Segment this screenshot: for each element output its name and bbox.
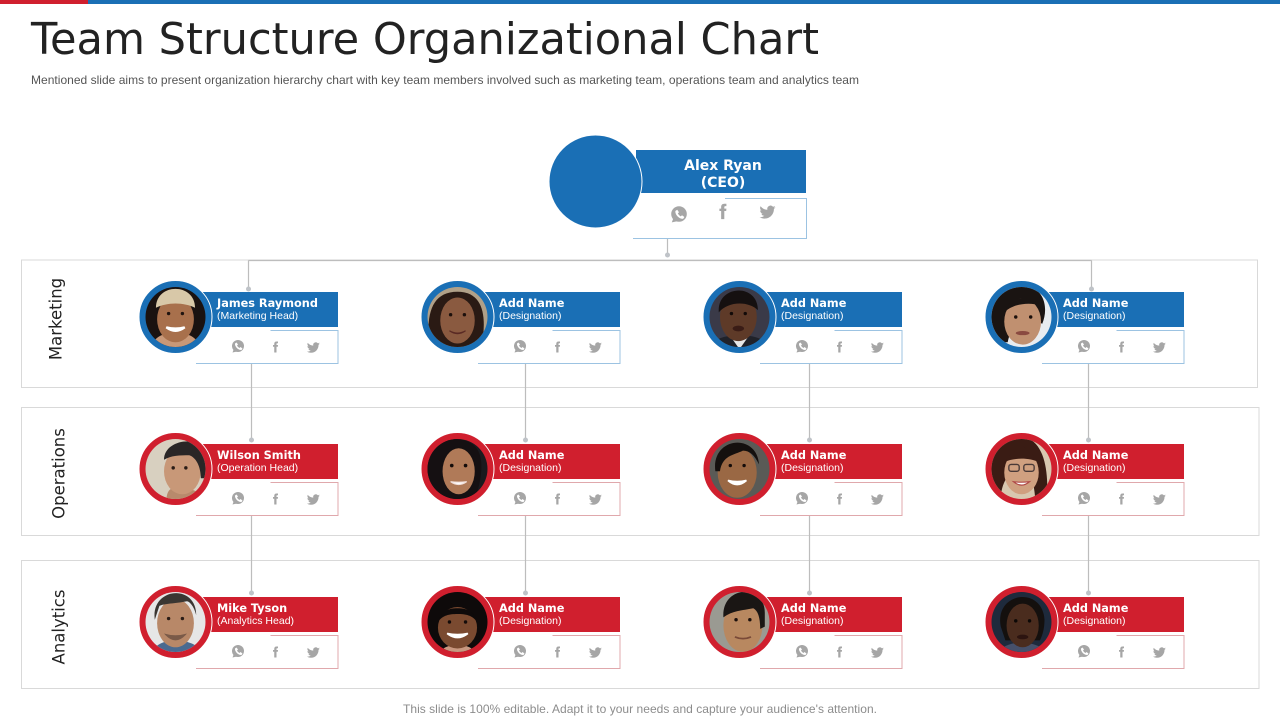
social icons <box>232 645 320 658</box>
name: Add Name <box>781 449 847 462</box>
designation: (Designation) <box>499 462 561 474</box>
portrait <box>710 592 770 652</box>
name: Add Name <box>499 297 565 310</box>
designation: (Designation) <box>781 615 843 627</box>
CEO designation: (CEO) <box>701 175 745 191</box>
card: operations 2 <box>421 432 620 516</box>
designation: (Designation) <box>499 310 561 322</box>
name: Mike Tyson <box>217 602 287 615</box>
card: analytics 4 <box>985 586 1184 668</box>
portrait <box>710 287 770 347</box>
row label: Marketing: Marketing <box>46 278 66 360</box>
subtitle: Mentioned slide aims to present organization hierarchy chart with key team members involved such as marketing team, operations team and analytics team <box>31 73 859 87</box>
name: Wilson Smith <box>217 449 301 462</box>
social icons <box>232 492 320 505</box>
portrait <box>710 439 770 499</box>
social icons <box>514 645 602 658</box>
social icons <box>796 340 884 353</box>
designation: (Designation) <box>499 615 561 627</box>
social icons <box>796 492 884 505</box>
name: James Raymond <box>216 297 318 310</box>
name: Add Name <box>499 449 565 462</box>
CEO banner <box>636 150 806 193</box>
designation: (Designation) <box>781 462 843 474</box>
portrait <box>146 592 206 652</box>
social icons <box>1078 645 1166 658</box>
social icons <box>1078 340 1166 353</box>
panel: analytics row <box>22 560 1259 688</box>
CEO name: Alex Ryan <box>684 158 762 174</box>
name: Add Name <box>781 602 847 615</box>
social icons <box>514 492 602 505</box>
card: James Raymond <box>139 280 338 364</box>
social icons <box>232 340 320 353</box>
designation: (Designation) <box>1063 462 1125 474</box>
footer note: This slide is 100% editable. Adapt it to your needs and capture your audience's attention. <box>403 702 877 716</box>
designation: (Marketing Head) <box>217 310 298 322</box>
designation: (Analytics Head) <box>217 615 294 627</box>
name: Add Name <box>1063 602 1129 615</box>
designation: (Designation) <box>1063 615 1125 627</box>
connectors <box>246 238 1094 596</box>
CEO social icons <box>671 204 776 222</box>
portrait <box>992 439 1052 499</box>
panel: marketing row <box>22 260 1258 388</box>
card: operations 3 <box>703 432 902 516</box>
portrait <box>992 287 1052 347</box>
card: analytics 2 <box>421 586 620 668</box>
portrait <box>428 439 488 499</box>
CEO portrait circle <box>549 135 642 228</box>
card: Mike Tyson <box>139 586 338 668</box>
row label: Operations: Operations <box>50 428 68 519</box>
name: Add Name <box>781 297 847 310</box>
card: marketing 4 <box>985 280 1184 364</box>
portrait <box>428 287 488 347</box>
designation: (Operation Head) <box>217 462 298 474</box>
portrait <box>992 592 1052 652</box>
portrait <box>146 287 206 347</box>
portrait <box>146 439 206 499</box>
card: operations 4 <box>985 432 1184 516</box>
social icons <box>796 645 884 658</box>
panel: operations row <box>22 408 1259 536</box>
card: CEO Alex Ryan <box>549 135 806 238</box>
portrait <box>428 592 488 652</box>
title: Team Structure Organizational Chart <box>30 14 819 65</box>
card: marketing 3 <box>703 280 902 364</box>
card: analytics 3 <box>703 586 902 668</box>
card: marketing 2 <box>421 280 620 364</box>
row label: Analytics: Analytics <box>50 590 68 664</box>
designation: (Designation) <box>1063 310 1125 322</box>
name: Add Name <box>499 602 565 615</box>
social icons <box>514 340 602 353</box>
top accent bar <box>0 0 1280 4</box>
name: Add Name <box>1063 297 1129 310</box>
card: Wilson Smith <box>139 432 338 516</box>
social icons <box>1078 492 1166 505</box>
CEO social box <box>633 198 806 238</box>
name: Add Name <box>1063 449 1129 462</box>
designation: (Designation) <box>781 310 843 322</box>
